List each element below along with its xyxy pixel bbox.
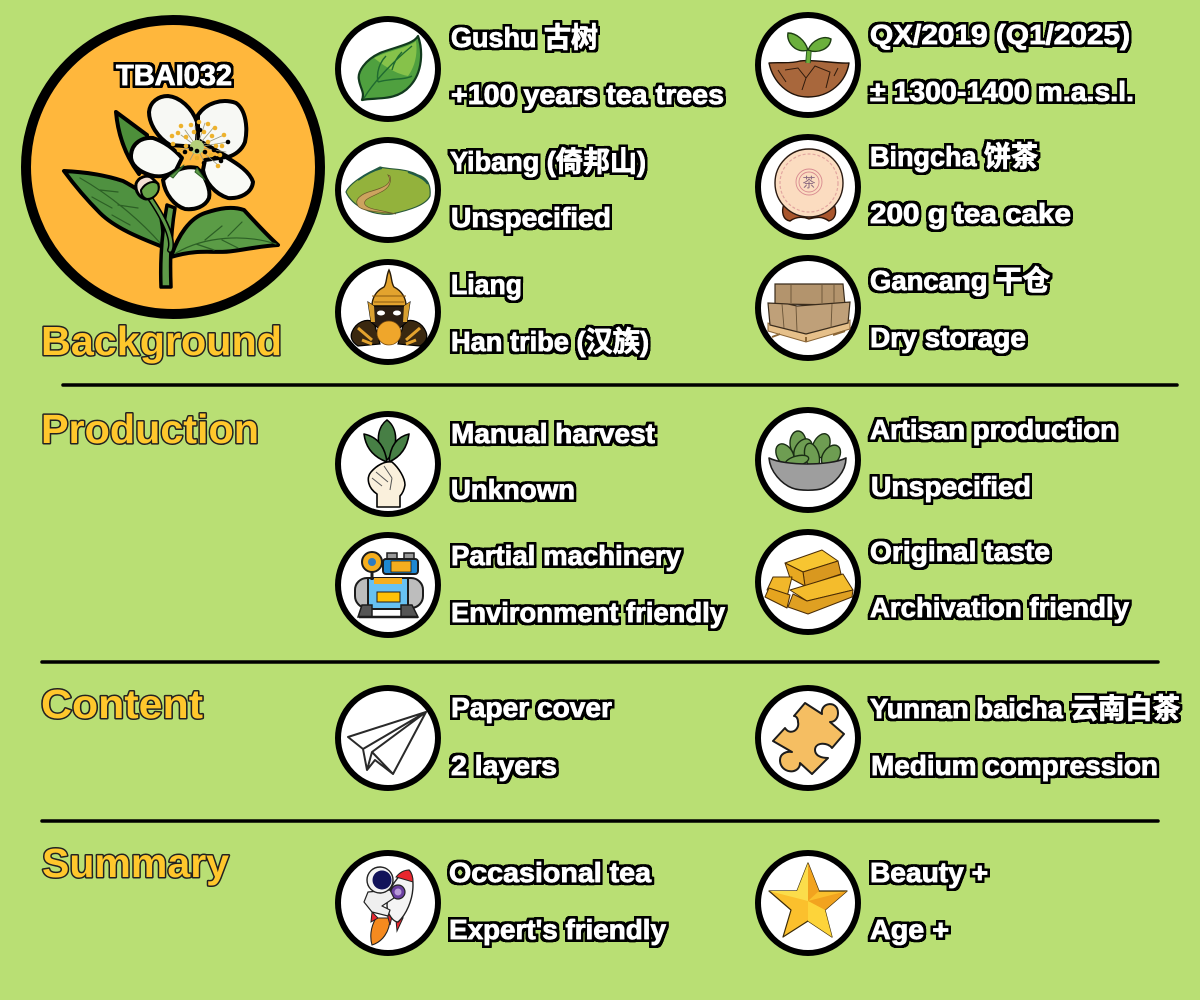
item: QX/2019 — [758, 15, 1134, 115]
item: Manual harvest — [338, 414, 655, 514]
heading: Production: Production — [41, 406, 259, 452]
icon: guardian figure — [338, 262, 438, 362]
icon: leaf — [338, 19, 438, 119]
label: Environment friendly: Environment friendly — [451, 597, 725, 628]
label: Partial machinery: Partial machinery — [451, 540, 681, 571]
label: 200 g: 200 g tea cake — [870, 198, 1071, 229]
label: +100 years: +100 years tea trees — [451, 79, 724, 110]
label: Unknown: Unknown — [451, 474, 575, 505]
label: Medium compression: Medium compression — [871, 750, 1158, 781]
label: Age +: Age + — [870, 914, 949, 945]
label: Beauty +: Beauty + — [870, 857, 988, 888]
item: Artisan production — [758, 410, 1117, 510]
item: Yunnan baicha — [758, 688, 1180, 788]
label: Original taste: Original taste — [870, 536, 1050, 567]
label: Archivation friendly: Archivation friendly — [870, 592, 1129, 623]
icon: bowl of leaves — [758, 410, 858, 510]
item: Beauty and age — [758, 853, 988, 953]
icon: hand holding leaves — [338, 414, 438, 514]
icon: seedling in soil — [758, 15, 858, 115]
panel: background — [26, 15, 1134, 364]
label: Artisan production: Artisan production — [870, 414, 1117, 445]
item: Occasional tea — [338, 853, 666, 953]
heading: Summary: Summary — [42, 840, 229, 886]
label: Unspecified: Unspecified — [871, 471, 1031, 502]
icon: paper plane — [338, 688, 438, 788]
label: Unspecified: Unspecified — [451, 202, 611, 233]
label: Yunnan baicha: Yunnan baicha 云南白茶 — [870, 693, 1180, 724]
label: Bingcha: Bingcha 饼茶 — [870, 141, 1038, 172]
label: Liang: Liang — [451, 269, 522, 300]
icon: puzzle piece — [758, 688, 858, 788]
item: Gushu — [338, 19, 724, 119]
item: Partial machinery — [338, 535, 725, 635]
icon: gold bars — [758, 532, 858, 632]
icon: machine — [338, 535, 438, 635]
heading: Content: Content — [41, 681, 203, 727]
label: Manual harvest: Manual harvest — [451, 418, 655, 449]
icon: mountain terrain — [338, 140, 438, 240]
label: Yibang: Yibang (倚邦山) — [450, 146, 646, 177]
label: 2 layers: 2 layers — [451, 750, 557, 781]
panel: content — [41, 681, 1180, 788]
emblem title: TBAI032 — [116, 60, 232, 92]
item: Paper cover — [338, 688, 612, 788]
label: Gancang: Gancang 干仓 — [870, 265, 1050, 296]
item: Liang — [338, 262, 649, 362]
label: Gushu: Gushu 古树 — [451, 22, 598, 53]
label: Occasional tea: Occasional tea — [449, 857, 651, 888]
illustration: tea flower — [64, 96, 278, 287]
icon: astronaut on rocket — [338, 853, 438, 953]
label: QX/2019: QX/2019 (Q1/2025) — [870, 19, 1130, 50]
label: Expert's friendly: Expert's friendly — [449, 914, 666, 945]
item: Original taste — [758, 532, 1129, 632]
label: Paper cover: Paper cover — [451, 692, 612, 723]
panel: production — [41, 406, 1129, 635]
icon: gold star — [758, 853, 858, 953]
emblem: tea flower badge — [26, 20, 320, 314]
item: Gancang — [758, 258, 1050, 358]
panel: summary — [42, 840, 988, 953]
item: Yibang — [338, 140, 646, 240]
item: Bingcha — [758, 137, 1071, 237]
icon: tea cake on stand — [758, 137, 858, 237]
heading: Background: Background — [41, 318, 282, 364]
icon: boxes on pallet — [758, 258, 858, 358]
icon: tea cake on stand: 茶 — [802, 175, 816, 190]
label: Han tribe: Han tribe (汉族) — [451, 326, 649, 357]
label: altitude: ± 1300-1400 m.a.s.l. — [870, 76, 1134, 107]
label: Dry storage: Dry storage — [870, 322, 1026, 353]
